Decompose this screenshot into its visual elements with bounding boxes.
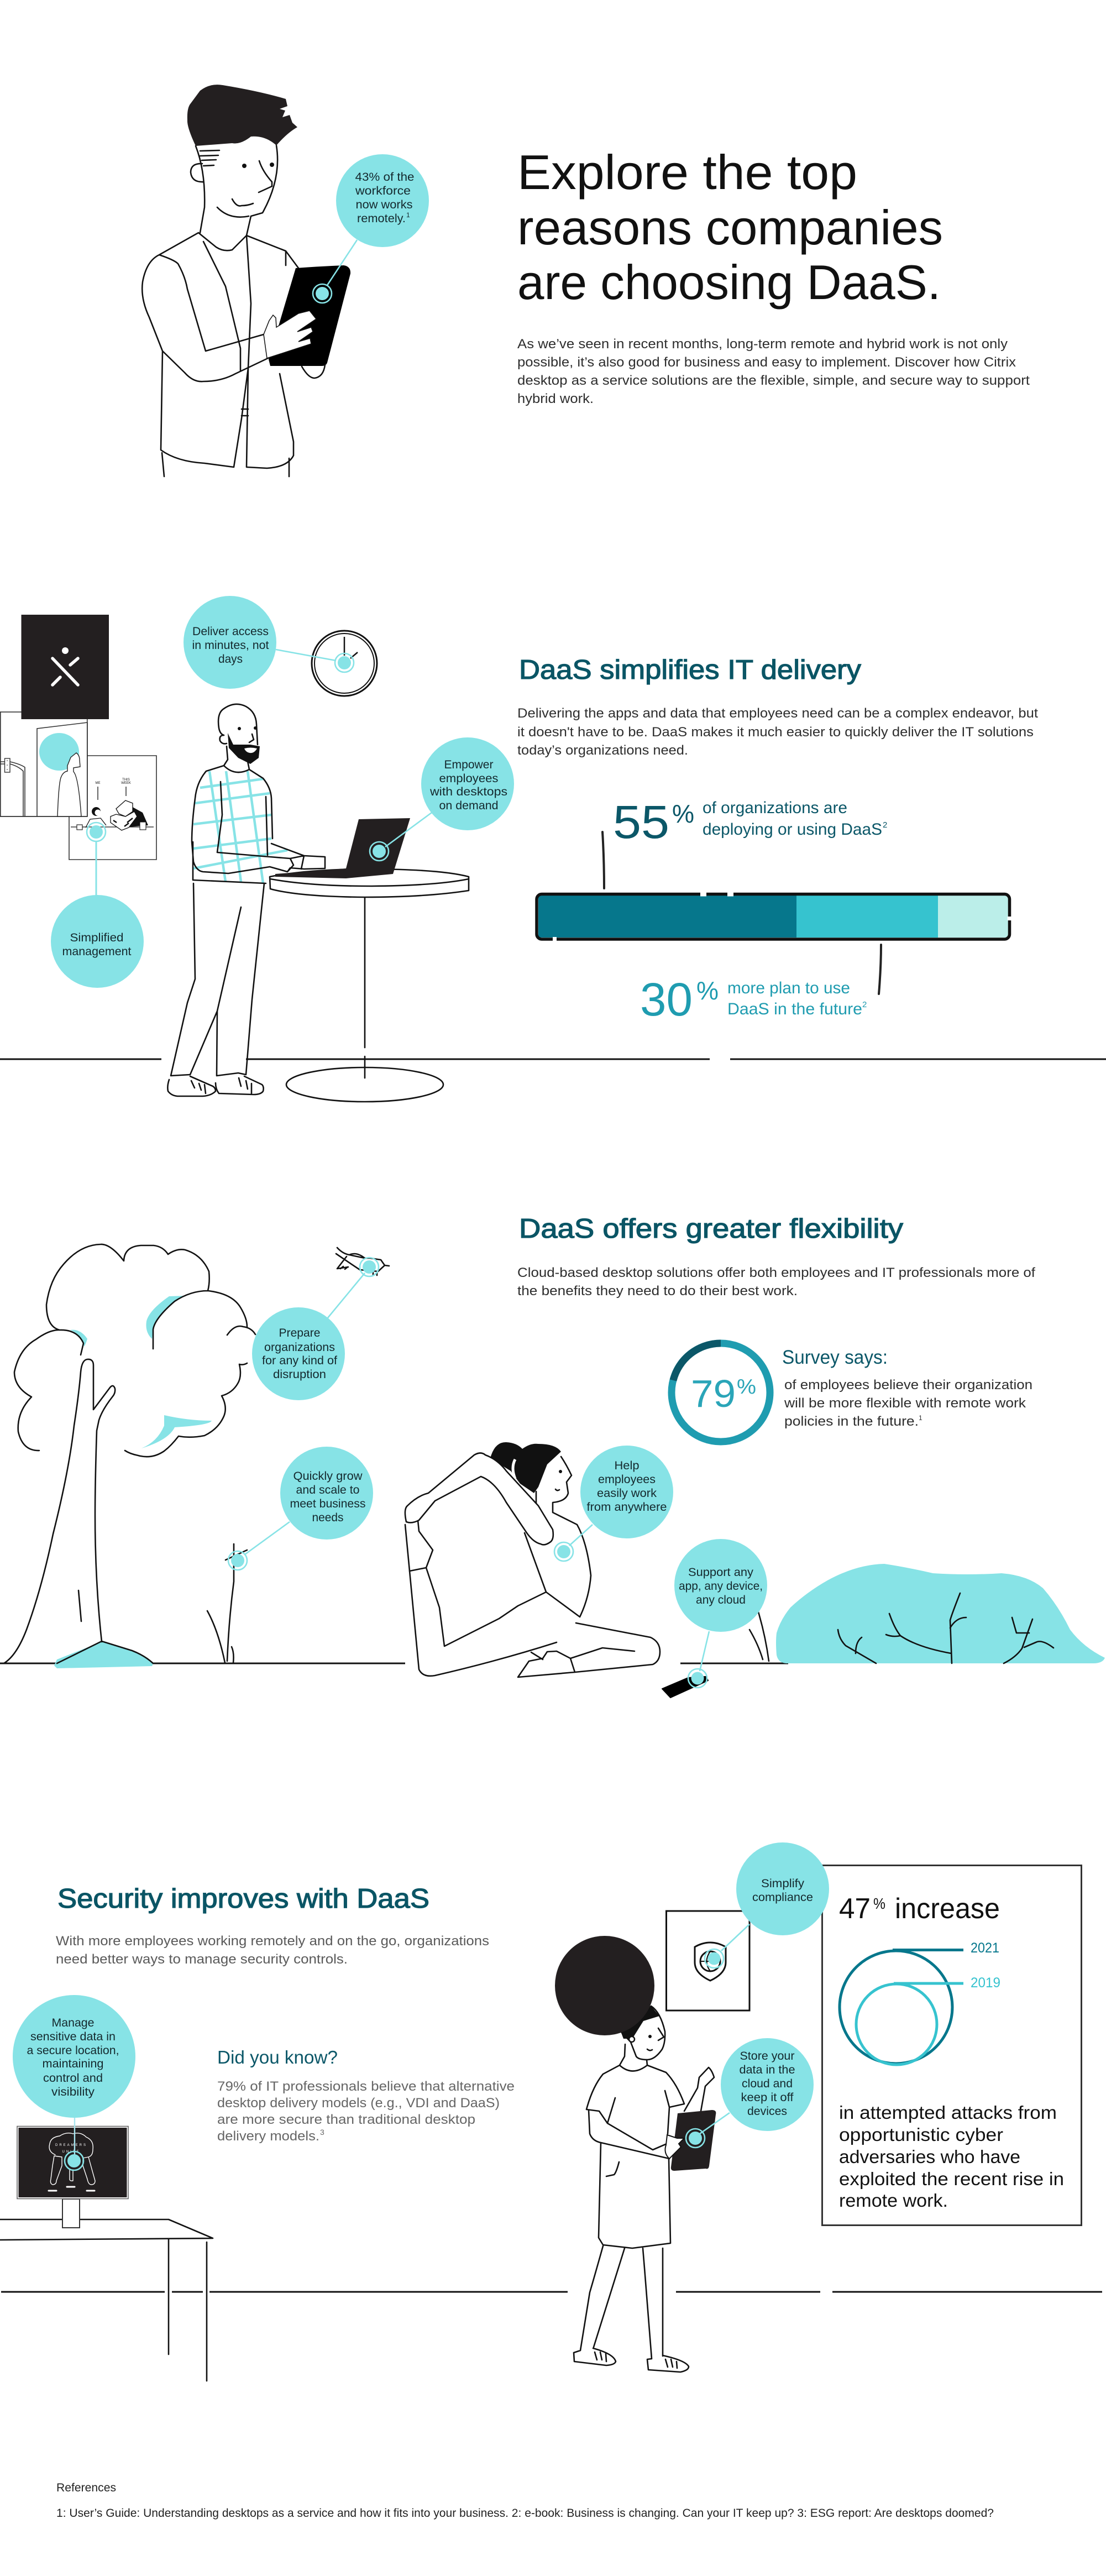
callout: store your data: cloud and — [742, 2077, 793, 2090]
icon: monitor artwork: DREAMERS — [55, 2144, 87, 2147]
did you know text: delivery models. — [217, 2129, 319, 2144]
stat: 30 percent: % — [696, 976, 719, 1005]
survey text: policies in the future. — [784, 1414, 919, 1429]
callout: prepare organizations: Prepare — [279, 1327, 321, 1339]
did you know text: desktop delivery models (e.g., VDI and DaaS) — [217, 2096, 500, 2111]
callout marker: frame — [87, 823, 106, 896]
callout: quickly grow: and scale to — [296, 1484, 359, 1496]
callout: store your data: Store your — [740, 2050, 795, 2062]
body text: With more employees working remotely and on the go, organizations — [56, 1934, 489, 1949]
callout: help employees: easily work — [597, 1487, 657, 1500]
icon: cartoon arm wrestle: THIS — [122, 778, 130, 782]
callout: help employees: employees — [598, 1473, 656, 1486]
callout: manage sensitive data: Manage — [52, 2017, 94, 2029]
donut chart: 79 percent — [672, 1343, 770, 1442]
callout: 43 percent — [336, 154, 429, 247]
panel: security improves — [0, 1842, 1102, 2381]
callout: deliver access: in minutes, not — [192, 639, 269, 652]
illustration: table with laptop — [270, 813, 469, 1102]
callout: empower employees — [421, 737, 514, 830]
icon: monitor artwork: UNITE — [62, 2150, 81, 2154]
callout: quickly grow: meet business — [290, 1498, 366, 1510]
title: reasons companies — [517, 200, 943, 255]
callout: help employees — [580, 1446, 673, 1538]
icon: cartoon arm wrestle: WEEK — [121, 782, 131, 785]
callout: 43 percent: remotely. — [357, 212, 406, 225]
illustration: bird — [328, 1248, 389, 1318]
did you know text: are more secure than traditional desktop — [217, 2112, 475, 2127]
intro text: possible, it’s also good for business and easy to implement. Discover how Citrix — [517, 355, 1016, 370]
stat heading: 47 — [839, 1893, 871, 1925]
icon: black square logo — [21, 615, 109, 719]
callout: help employees: from anywhere — [587, 1501, 667, 1514]
floor line — [0, 1663, 788, 1664]
callout: prepare organizations: for any kind of — [262, 1354, 337, 1367]
body text: Delivering the apps and data that employees need can be a complex endeavor, but — [517, 706, 1038, 721]
donut chart: 79 percent: 79 — [691, 1372, 736, 1415]
illustration: gallery frames — [0, 615, 156, 896]
callout: manage sensitive data: a secure location, — [27, 2044, 119, 2057]
callout: prepare organizations — [252, 1307, 345, 1400]
survey text: Survey says: — [782, 1347, 888, 1368]
stat: 55 percent: % — [672, 799, 694, 828]
panel: 47 percent increase — [822, 1865, 1081, 2226]
body text — [517, 706, 1038, 758]
stat: 55 percent: 55 — [613, 796, 669, 848]
illustration: desk with monitor — [0, 2117, 213, 2381]
references: References — [56, 2481, 116, 2494]
body text — [517, 1265, 1035, 1299]
intro text: hybrid work. — [517, 391, 594, 406]
stat text: opportunistic cyber — [839, 2124, 1003, 2145]
icon: cartoon arm wrestle: ME — [95, 782, 101, 785]
stat: 30 percent: DaaS in the future — [727, 1000, 862, 1018]
callout: simplified management: management — [62, 945, 132, 958]
stat text — [839, 2102, 1064, 2211]
donut chart: 79 percent: % — [737, 1375, 756, 1399]
panel: hero — [142, 85, 1030, 477]
callout: store your data: data in the — [740, 2064, 795, 2076]
circle chart: 2021 vs 2019 — [840, 1940, 1000, 2065]
callout: store your data: devices — [747, 2105, 787, 2118]
stat text: in attempted attacks from — [839, 2102, 1057, 2123]
callout: simplify compliance: Simplify — [761, 1877, 805, 1890]
body text: it doesn't have to be. DaaS makes it much easier to quickly deliver the IT solutions — [517, 725, 1034, 740]
did you know text: 3 — [320, 2128, 324, 2137]
callout: store your data — [721, 2038, 814, 2131]
callout: simplified management: Simplified — [70, 931, 124, 944]
callout: deliver access — [184, 596, 276, 689]
callout: manage sensitive data: control and — [43, 2072, 103, 2085]
illustration: woman in yoga pose — [405, 1442, 660, 1677]
references: 1: User’s Guide: Understanding desktops as a service and how it fits into your business. 2: e-book: Business is changing. Can your IT keep up? 3: ESG report: Are desktops doomed? — [56, 2507, 994, 2520]
callout: empower employees: with desktops — [429, 786, 507, 798]
callout: simplify compliance: compliance — [752, 1891, 813, 1904]
callout: empower employees: employees — [439, 772, 499, 785]
callout: simplify compliance — [736, 1842, 829, 1935]
illustration: woman with tablet — [555, 1936, 730, 2372]
icon: dropped phone — [662, 1631, 709, 1698]
stat: 55 percent — [602, 796, 887, 888]
references — [56, 2481, 994, 2520]
intro text: As we’ve seen in recent months, long-term remote and hybrid work is not only — [517, 337, 1008, 352]
icon: wall clock — [276, 631, 377, 696]
floor line — [0, 1058, 1106, 1060]
callout: prepare organizations: organizations — [264, 1341, 335, 1354]
stat heading: increase — [895, 1893, 1000, 1925]
callout: 43 percent: now works — [356, 198, 412, 211]
stat heading: % — [873, 1895, 885, 1912]
callout: store your data: keep it off — [741, 2091, 794, 2104]
heading: Security improves with DaaS — [57, 1884, 429, 1914]
callout: support any: app, any device, — [679, 1580, 763, 1593]
stat: 30 percent: 30 — [640, 973, 693, 1025]
stat: 30 percent: more plan to use — [727, 979, 850, 997]
callout: manage sensitive data: visibility — [51, 2086, 95, 2098]
callout: empower employees: on demand — [439, 799, 499, 812]
panel: greater flexibility — [0, 1214, 1105, 1698]
body text: today’s organizations need. — [517, 743, 688, 758]
callout: manage sensitive data: sensitive data in — [30, 2030, 116, 2043]
illustration: standing man with laptop — [167, 704, 325, 1096]
callout: quickly grow — [280, 1447, 373, 1540]
stat heading — [839, 1893, 1000, 1925]
callout: 43 percent: 1 — [406, 211, 410, 219]
survey text: 1 — [919, 1414, 922, 1422]
intro text — [517, 337, 1030, 406]
callout: help employees: Help — [615, 1459, 639, 1472]
callout: support any: any cloud — [696, 1594, 746, 1606]
stat: 30 percent: 2 — [862, 1000, 867, 1009]
title: Explore the top — [517, 145, 857, 200]
grass — [749, 1612, 769, 1661]
icon: monitor artwork — [49, 2133, 95, 2191]
callout: deliver access: Deliver access — [192, 625, 269, 638]
callout: quickly grow: Quickly grow — [293, 1470, 363, 1483]
stat: 55 percent: deploying or using DaaS — [703, 820, 882, 839]
icon: cartoon arm wrestle — [71, 778, 154, 830]
did you know text — [217, 2047, 515, 2144]
callout: manage sensitive data: maintaining — [42, 2057, 104, 2070]
callout: manage sensitive data — [13, 1995, 135, 2118]
survey text: will be more flexible with remote work — [784, 1396, 1026, 1411]
illustration: man with tablet — [142, 85, 357, 477]
callout: 43 percent: workforce — [355, 185, 411, 197]
illustration: bush — [776, 1564, 1105, 1663]
callout: empower employees: Empower — [444, 758, 493, 771]
did you know text: Did you know? — [217, 2047, 338, 2067]
body text: the benefits they need to do their best work. — [517, 1284, 798, 1299]
icon: framed shield — [667, 1911, 749, 2010]
illustration: tree — [4, 1244, 255, 1668]
body text: Cloud-based desktop solutions offer both employees and IT professionals more of — [517, 1265, 1035, 1280]
circle chart: 2021 vs 2019: 2021 — [971, 1940, 999, 1956]
stat: 30 percent — [640, 945, 881, 1025]
callout: simplified management — [51, 895, 144, 988]
intro text: desktop as a service solutions are the flexible, simple, and secure way to support — [517, 373, 1030, 388]
stat text: adversaries who have — [839, 2146, 1020, 2167]
panel: simplifies IT delivery — [0, 596, 1106, 1102]
heading: DaaS simplifies IT delivery — [519, 655, 862, 685]
stat text: remote work. — [839, 2190, 948, 2211]
survey text: of employees believe their organization — [784, 1378, 1032, 1392]
callout: support any — [674, 1539, 767, 1632]
callout: prepare organizations: disruption — [273, 1368, 326, 1381]
illustration: flower — [207, 1522, 290, 1663]
callout: 43 percent: 43% of the — [355, 171, 415, 184]
body text — [56, 1934, 489, 1967]
survey text — [782, 1347, 1032, 1429]
stat: 55 percent: of organizations are — [703, 799, 847, 817]
heading: DaaS offers greater flexibility — [519, 1214, 904, 1244]
callout: support any: Support any — [688, 1566, 754, 1579]
stat text: exploited the recent rise in — [839, 2169, 1064, 2189]
callout: quickly grow: needs — [312, 1511, 344, 1524]
callout: deliver access: days — [218, 653, 243, 666]
stat: 55 percent: 2 — [883, 820, 887, 830]
floor line — [1, 2291, 1102, 2293]
callout marker: tablet — [313, 240, 357, 303]
circle chart: 2021 vs 2019: 2019 — [971, 1975, 1000, 1991]
bar chart — [537, 894, 1009, 939]
body text: need better ways to manage security controls. — [56, 1952, 348, 1967]
title: are choosing DaaS. — [517, 255, 941, 310]
did you know text: 79% of IT professionals believe that alternative — [217, 2079, 515, 2094]
title — [517, 145, 943, 310]
